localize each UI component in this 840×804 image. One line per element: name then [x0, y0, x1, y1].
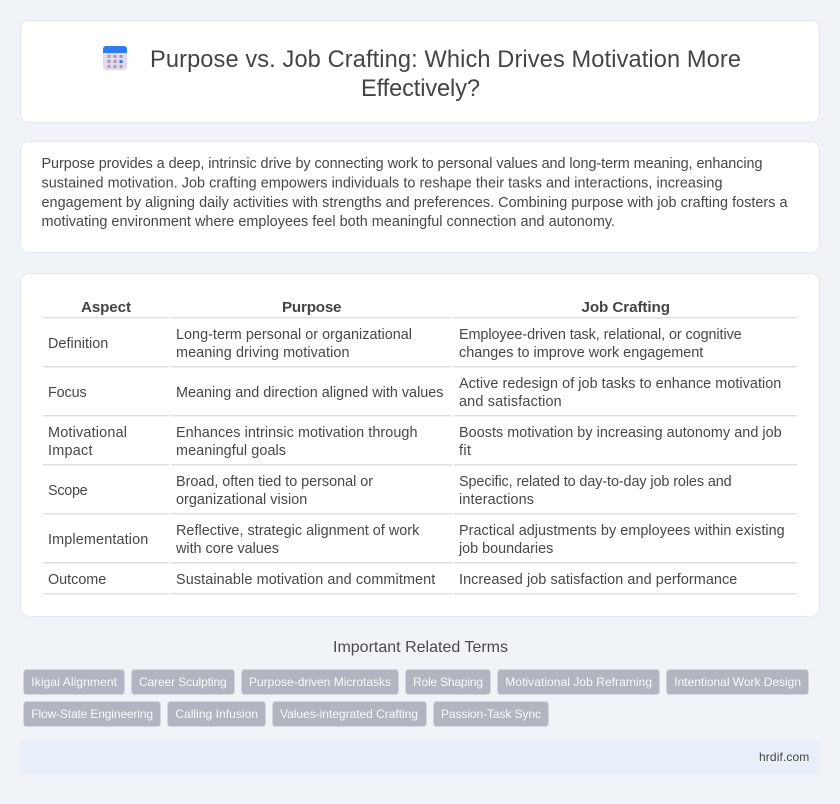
row: outcome: Increased job satisfaction and performance [459, 572, 737, 588]
panel: comparison table [20, 274, 820, 616]
row: focus [48, 376, 781, 410]
row: motivational impact: Boosts motivation by increasing autonomy and job [459, 425, 782, 441]
related term tags: Values-integrated Crafting [280, 707, 418, 721]
footer: hrdif.com [759, 750, 809, 764]
row: motivational impact: Motivational [48, 425, 127, 441]
panel: intro text: engagement by aligning daily activities with strengths and preferences. Combining purpose with job crafting fosters a [42, 195, 788, 211]
table header: Purpose [282, 299, 342, 316]
related term tags: Role Shaping [413, 675, 483, 689]
related term tags: Career Sculpting [139, 675, 227, 689]
panel: intro text: sustained motivation. Job crafting empowers individuals to reshape their tasks and interactions, increasing [42, 176, 722, 192]
panel: title header [20, 20, 820, 122]
row: scope: Scope [48, 483, 88, 499]
row: outcome [48, 572, 737, 588]
row: motivational impact: fit [459, 443, 471, 459]
row: outcome: Outcome [48, 572, 106, 588]
row: scope: interactions [459, 492, 534, 508]
related term tags: Intentional Work Design [674, 675, 801, 689]
icon: calendar [103, 46, 127, 70]
related term tags: Motivational Job Reframing [505, 675, 652, 689]
row: definition: Definition [48, 336, 108, 352]
row: focus: Meaning and direction aligned with values [176, 385, 444, 401]
related term tags: Passion-Task Sync [441, 707, 541, 721]
row: definition: meaning driving motivation [176, 345, 350, 361]
title: Purpose vs. Job Crafting: Which Drives Motivation More [150, 47, 741, 73]
footer [20, 740, 820, 774]
panel: intro text: motivating environment where employees feel both meaningful connection and autonomy. [42, 214, 615, 230]
row: motivational impact: meaningful goals [176, 443, 286, 459]
related term tags: Ikigai Alignment [31, 675, 118, 689]
row: motivational impact: Enhances intrinsic motivation through [176, 425, 418, 441]
related term tags [24, 670, 808, 726]
related term tags: Purpose-driven Microtasks [249, 675, 391, 689]
table header: Aspect [81, 299, 131, 316]
panel: intro text [20, 142, 820, 252]
row: implementation: Practical adjustments by employees within existing [459, 523, 785, 539]
row: implementation: with core values [175, 541, 279, 557]
row: focus: Active redesign of job tasks to enhance motivation [459, 376, 781, 392]
table header [81, 299, 670, 316]
row: implementation [48, 523, 785, 557]
table header: Job Crafting [582, 299, 670, 316]
row: motivational impact [48, 425, 782, 459]
row: scope: Broad, often tied to personal or [176, 474, 373, 490]
row: implementation: Implementation [48, 532, 148, 548]
row: definition [48, 327, 742, 361]
row: scope: Specific, related to day-to-day job roles and [459, 474, 732, 490]
row: motivational impact: Impact [48, 443, 92, 459]
row: focus: and satisfaction [459, 394, 562, 410]
related term tags: Flow-State Engineering [31, 707, 153, 721]
panel: intro text: Purpose provides a deep, intrinsic drive by connecting work to personal values and long-term meaning, enhancing [42, 156, 762, 172]
row: definition: Employee-driven task, relational, or cognitive [459, 327, 742, 343]
row: outcome: Sustainable motivation and commitment [176, 572, 435, 588]
heading: related terms: Important Related Terms [333, 639, 508, 656]
row: implementation: job boundaries [458, 541, 553, 557]
row: definition: Long-term personal or organizational [176, 327, 412, 343]
row: definition: changes to improve work engagement [459, 345, 703, 361]
row: focus: Focus [48, 385, 87, 401]
title: Effectively? [361, 76, 480, 102]
related term tags: Calling Infusion [175, 707, 258, 721]
title [150, 47, 741, 102]
row: scope: organizational vision [176, 492, 307, 508]
row: implementation: Reflective, strategic alignment of work [176, 523, 420, 539]
row: scope [48, 474, 732, 508]
